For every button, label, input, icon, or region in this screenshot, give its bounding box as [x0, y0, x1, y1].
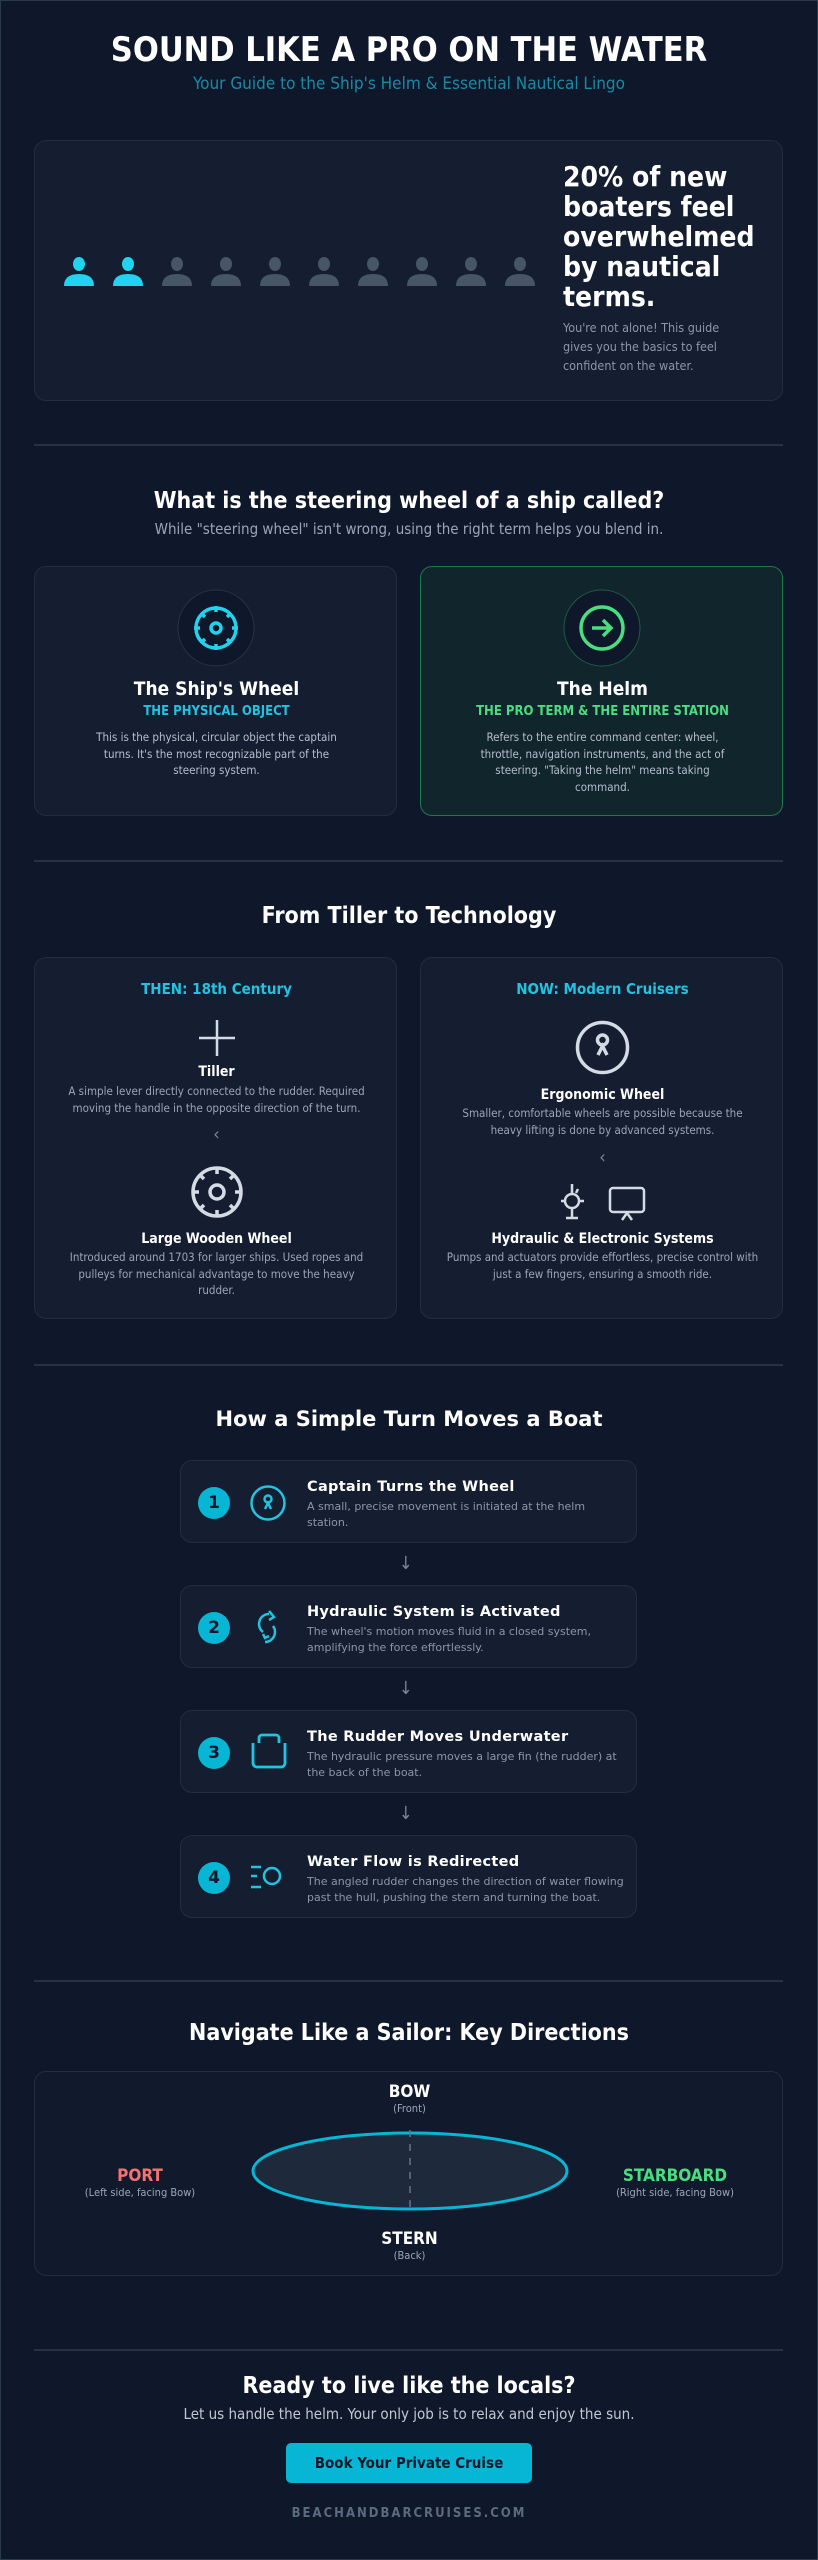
- icon: people row: [64, 257, 535, 286]
- subtitle: Your Guide to the Ship's Helm & Essential Nautical Lingo: [193, 74, 625, 94]
- heading: call to action: Ready to live like the locals?: [242, 2373, 576, 2399]
- label: bow: BOW: [389, 2082, 430, 2102]
- step 2: Hydraulic System is Activated: [307, 1604, 561, 1620]
- panel: helm: [420, 566, 783, 816]
- label: bow: [389, 2082, 430, 2115]
- panel: helm: The Helm: [557, 678, 648, 700]
- button: [286, 2443, 532, 2483]
- icon: hydraulic & electronic: [561, 1184, 646, 1221]
- footer: BEACHANDBARCRUISES.COM: [292, 2506, 526, 2521]
- label: starboard: (Right side, facing Bow): [616, 2186, 734, 2199]
- title: SOUND LIKE A PRO ON THE WATER: [111, 30, 707, 70]
- button: Book Your Private Cruise: [315, 2454, 503, 2472]
- icon: helm: [564, 590, 640, 666]
- step 1: [180, 1460, 637, 1543]
- step 4: [180, 1835, 637, 1918]
- step 1: 1: [208, 1493, 220, 1513]
- label: bow: (Front): [393, 2102, 426, 2115]
- icon: wooden wheel: [191, 1166, 243, 1218]
- panel: then: Large Wooden Wheel: [141, 1231, 292, 1247]
- cta text: Let us handle the helm. Your only job is to relax and enjoy the sun.: [184, 2405, 634, 2423]
- heading: tiller to technology: From Tiller to Technology: [262, 903, 556, 929]
- arrow: chevron: ‹: [213, 1124, 220, 1145]
- panel: ship's wheel: The Ship's Wheel: [134, 678, 299, 700]
- panel: ship's wheel: [34, 566, 397, 816]
- label: starboard: [616, 2166, 734, 2199]
- heading: how a turn works: How a Simple Turn Moves a Boat: [216, 1407, 602, 1431]
- step 3: The Rudder Moves Underwater: [307, 1729, 568, 1745]
- panel: helm: Refers to the entire command center: wheel, throttle, navigation instruments, and the act of steering. "Taking the helm" means taking command.: [481, 730, 724, 794]
- label: port: (Left side, facing Bow): [85, 2186, 195, 2199]
- panel: now: [420, 957, 783, 1319]
- panel: then: [34, 957, 397, 1319]
- label: stern: [381, 2229, 438, 2262]
- label: starboard: STARBOARD: [623, 2166, 727, 2186]
- label: port: [85, 2166, 195, 2199]
- heading: steering wheel: What is the steering wheel of a ship called?: [154, 488, 664, 514]
- icon: wheel: [250, 1485, 286, 1521]
- step 4: Water Flow is Redirected: [307, 1854, 519, 1870]
- icon: ergonomic wheel: [576, 1020, 630, 1074]
- step 2: The wheel's motion moves fluid in a closed system, amplifying the force effortlessly.: [307, 1625, 591, 1654]
- arrow: chevron: ‹: [599, 1147, 606, 1168]
- label: port: PORT: [117, 2166, 163, 2186]
- subheading: While "steering wheel" isn't wrong, using the right term helps you blend in.: [155, 520, 663, 538]
- step 2: [180, 1585, 637, 1668]
- panel: ship's wheel: THE PHYSICAL OBJECT: [143, 704, 290, 719]
- step 4: The angled rudder changes the direction of water flowing past the hull, pushing the stern and turning the boat.: [307, 1875, 624, 1904]
- icon: rudder: [252, 1734, 286, 1768]
- boat outline: [252, 2130, 568, 2210]
- step 1: Captain Turns the Wheel: [307, 1479, 515, 1495]
- arrow: ↓: [399, 1803, 413, 1824]
- panel: then: A simple lever directly connected to the rudder. Required moving the handle in the opposite direction of the turn.: [68, 1084, 365, 1114]
- step 3: 3: [208, 1743, 220, 1763]
- step 2: 2: [208, 1618, 220, 1638]
- panel: ship's wheel: This is the physical, circular object the captain turns. It's the most recognizable part of the steering system.: [96, 730, 337, 777]
- label: stern: STERN: [381, 2229, 438, 2249]
- arrow: ↓: [399, 1678, 413, 1699]
- panel: then: Introduced around 1703 for larger ships. Used ropes and pulleys for mechanical advantage to move the heavy rudder.: [70, 1250, 363, 1297]
- panel: then: THEN: 18th Century: [141, 980, 292, 998]
- panel: now: Ergonomic Wheel: [541, 1087, 664, 1103]
- step 1: A small, precise movement is initiated at the helm station.: [307, 1500, 585, 1529]
- icon: wheel: [178, 590, 254, 666]
- icon: tiller: [199, 1020, 235, 1056]
- icon: water flow: [251, 1866, 282, 1888]
- step 3: The hydraulic pressure moves a large fin (the rudder) at the back of the boat.: [307, 1750, 617, 1779]
- stat text: 20% of new boaters feel overwhelmed by nautical terms.: [563, 160, 755, 313]
- panel: directions diagram: [34, 2071, 783, 2276]
- arrow: ↓: [399, 1553, 413, 1574]
- label: stern: (Back): [394, 2249, 425, 2262]
- heading: directions: Navigate Like a Sailor: Key Directions: [189, 2020, 629, 2046]
- icon: hydraulic: [258, 1610, 276, 1644]
- panel: stat: [34, 140, 783, 401]
- panel: then: Tiller: [198, 1064, 235, 1080]
- step 4: 4: [208, 1868, 220, 1888]
- stat text: You're not alone! This guide gives you the basics to feel confident on the water.: [563, 320, 719, 373]
- panel: now: NOW: Modern Cruisers: [516, 980, 689, 998]
- step 3: [180, 1710, 637, 1793]
- panel: now: Hydraulic & Electronic Systems: [491, 1231, 714, 1247]
- panel: helm: THE PRO TERM & THE ENTIRE STATION: [476, 704, 729, 719]
- panel: now: Smaller, comfortable wheels are possible because the heavy lifting is done by advanced systems.: [462, 1106, 743, 1136]
- panel: now: Pumps and actuators provide effortless, precise control with just a few fingers, ensuring a smooth ride.: [447, 1250, 758, 1280]
